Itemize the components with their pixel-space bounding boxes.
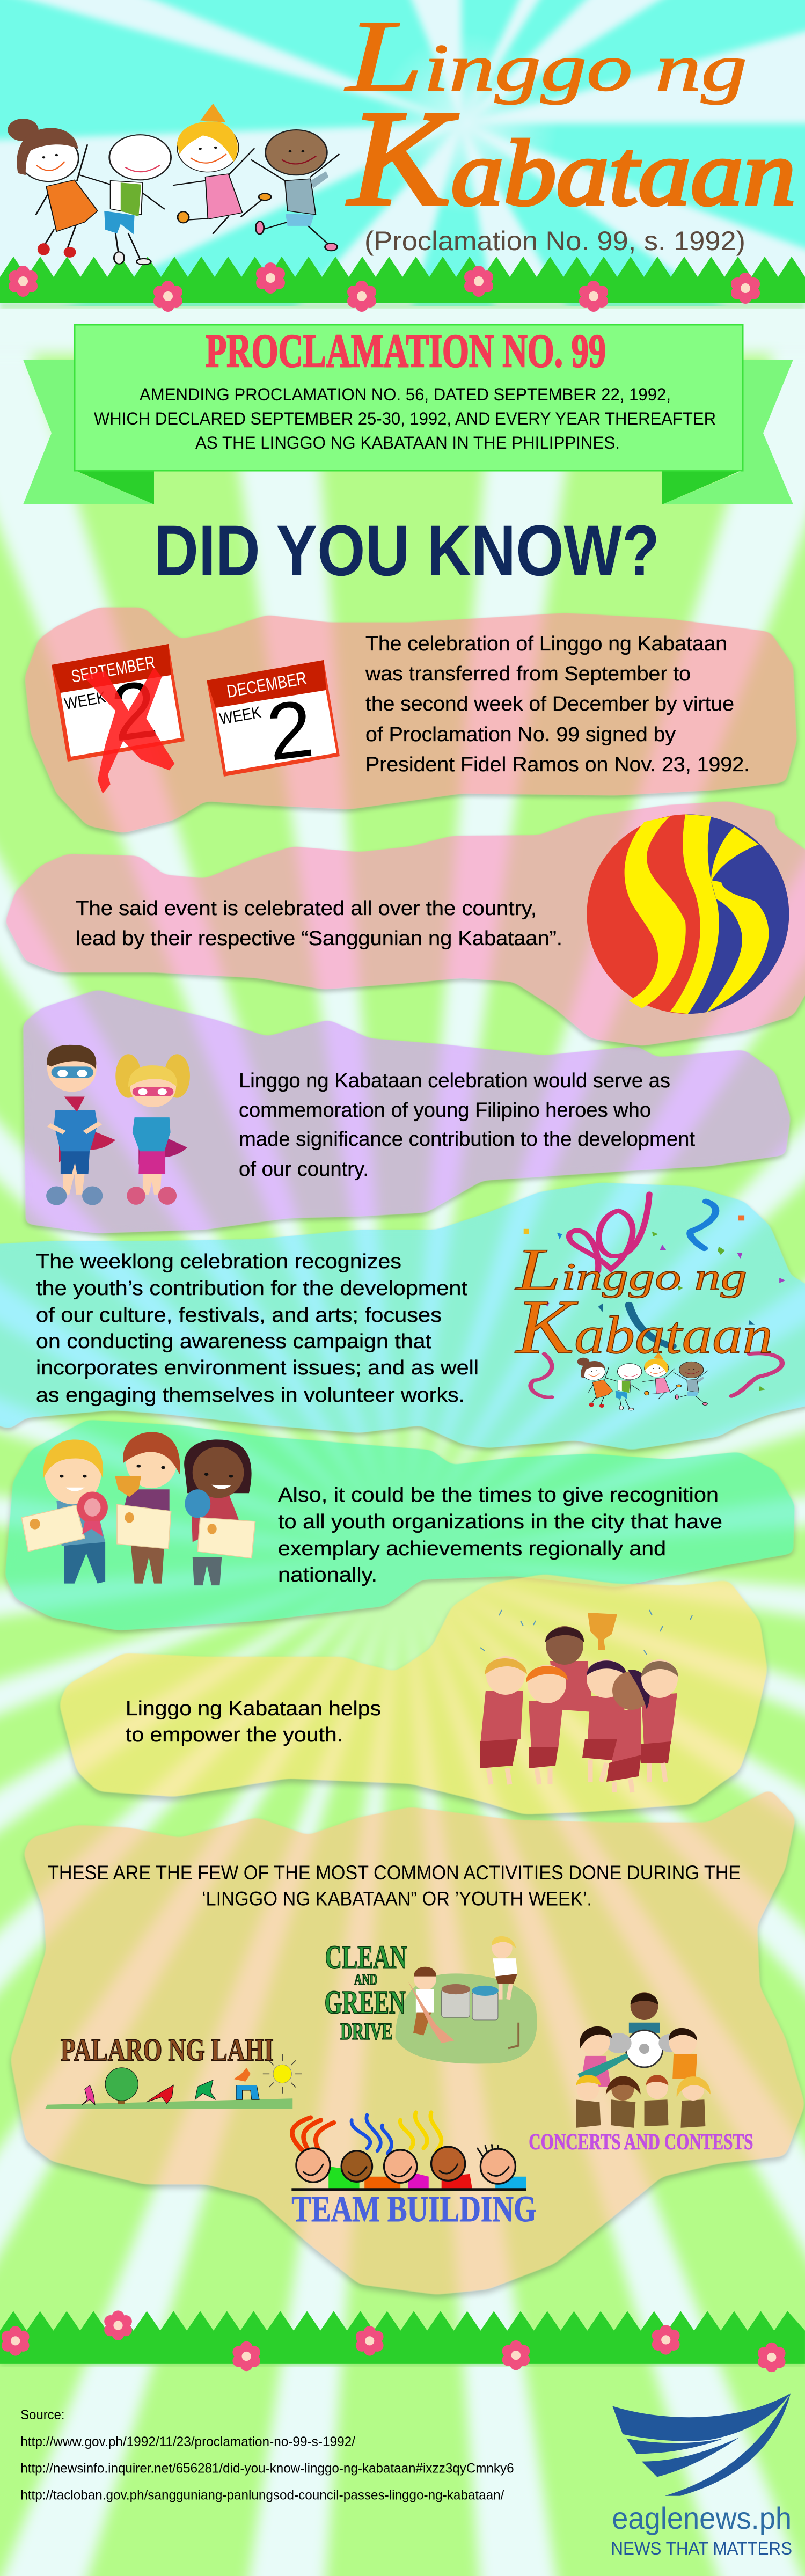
activity: Team Building — [291, 2112, 537, 2229]
source list: http://newsinfo.inquirer.net/656281/did-you-know-linggo-ng-kabataan#ixzz3qyCmnky6 — [20, 2461, 514, 2476]
illustration: kids with awards — [21, 1432, 255, 1585]
text block: was transferred from September to — [365, 663, 691, 685]
text block: on conducting awareness campaign that — [36, 1330, 431, 1353]
activities intro text: THESE ARE THE FEW OF THE MOST COMMON ACTIVITIES DONE DURING THE — [48, 1861, 741, 1884]
banner text: AS THE LINGGO NG KABATAAN IN THE PHILIPPINES. — [195, 433, 620, 452]
text block: commemoration of young Filipino heroes who — [239, 1099, 651, 1122]
text block: nationally. — [278, 1564, 377, 1586]
text block: Linggo ng Kabataan helps — [126, 1697, 381, 1720]
activity: Palaro ng Lahi: PALARO NG LAHI — [61, 2032, 274, 2068]
panel: young heroes — [23, 990, 791, 1233]
text block: Also, it could be the times to give recognition — [278, 1484, 719, 1506]
text block: Linggo ng Kabataan celebration would serve as — [239, 1070, 670, 1092]
hero boy — [46, 1045, 115, 1205]
activity: Team Building: TEAM BUILDING — [291, 2189, 537, 2229]
heading: Did You Know: DID YOU KNOW? — [154, 511, 660, 591]
icon: September calendar — [52, 644, 185, 794]
illustration: team with trophy — [480, 1610, 692, 1792]
banner heading: PROCLAMATION NO. 99 — [206, 325, 606, 377]
source list — [20, 2407, 514, 2502]
title: Linggo ng Kabataan — [344, 0, 796, 235]
panel: common activities — [10, 1789, 805, 2295]
panel: empower the youth — [59, 1574, 767, 1814]
illustration: ribbons and confetti — [524, 1194, 786, 1397]
text block: as engaging themselves in volunteer works. — [36, 1384, 465, 1407]
text block: to all youth organizations in the city that have — [278, 1511, 722, 1533]
logo: Eagle News: NEWS THAT MATTERS — [611, 2539, 792, 2559]
text block — [278, 1484, 722, 1586]
panel: weeklong celebration — [0, 1183, 805, 1450]
activities intro text: ‘LINGGO NG KABATAAN” OR ’YOUTH WEEK’. — [202, 1887, 592, 1910]
hero girl — [115, 1054, 190, 1205]
logo: Eagle News: eaglenews.ph — [612, 2501, 792, 2536]
text block: of Proclamation No. 99 signed by — [365, 723, 676, 746]
illustration: mini kids — [577, 1352, 708, 1410]
panel: Sangguniang Kabataan — [5, 801, 805, 1046]
icon: December calendar — [207, 660, 340, 778]
logo: Eagle News — [611, 2393, 792, 2559]
illustration: hero kids — [46, 1045, 190, 1205]
activity: Concerts and Contests — [529, 1992, 753, 2155]
text block — [126, 1697, 381, 1746]
panel: transfer of celebration — [25, 608, 797, 833]
text block — [365, 633, 750, 776]
text block — [239, 1070, 695, 1181]
text block: the youth’s contribution for the development — [36, 1277, 467, 1300]
icon: September calendar: 2 — [106, 663, 162, 758]
text block: The said event is celebrated all over the country, — [76, 897, 537, 920]
banner text: WHICH DECLARED SEPTEMBER 25-30, 1992, AND EVERY YEAR THEREAFTER — [94, 409, 716, 428]
footer flowers — [2, 2310, 786, 2372]
title: Linggo ng Kabataan: Kabataan — [347, 83, 796, 235]
mini logo: Linggo ng Kabataan — [514, 1236, 773, 1370]
text block — [36, 1250, 479, 1407]
activity: Clean and Green Drive: AND — [354, 1971, 377, 1988]
award kid three — [184, 1439, 255, 1585]
icon: December calendar: DECEMBER — [225, 668, 308, 701]
text block: incorporates environment issues; and as well — [36, 1357, 479, 1379]
award kid one — [21, 1440, 108, 1584]
text block: of our culture, festivals, and arts; focuses — [36, 1304, 442, 1327]
mini logo: Linggo ng Kabataan: Kabataan — [515, 1284, 773, 1370]
activity: Clean and Green Drive: CLEAN — [325, 1939, 407, 1975]
text block: of our country. — [239, 1158, 369, 1181]
header flowers — [9, 262, 760, 312]
header background: cyan sunburst — [0, 0, 805, 306]
icon: December calendar: 2 — [262, 683, 318, 778]
panel: recognition — [5, 1419, 795, 1630]
subtitle: (Proclamation No. 99, s. 1992) — [364, 226, 745, 256]
banner text: AMENDING PROCLAMATION NO. 56, DATED SEPTEMBER 22, 1992, — [140, 385, 671, 404]
text block: lead by their respective “Sanggunian ng Kabataan”. — [76, 927, 562, 950]
activity: Clean and Green Drive: GREEN — [325, 1985, 406, 2021]
icon: red cross — [82, 668, 174, 794]
text block: The weeklong celebration recognizes — [36, 1250, 401, 1273]
text block: the second week of December by virtue — [365, 693, 734, 715]
activity: Clean and Green Drive: DRIVE — [340, 2018, 393, 2044]
icon: wing — [612, 2393, 791, 2496]
activity: Clean and Green Drive — [325, 1936, 537, 2063]
footer grass strip — [0, 2311, 805, 2367]
source list: http://www.gov.ph/1992/11/23/proclamation-no-99-s-1992/ — [20, 2434, 355, 2449]
text block: made significance contribution to the development — [239, 1128, 695, 1151]
text block — [76, 897, 562, 950]
activities intro text — [48, 1861, 741, 1910]
banner text — [94, 385, 716, 452]
text block: to empower the youth. — [126, 1724, 343, 1746]
mini logo: Linggo ng Kabataan: L inggo ng — [514, 1236, 747, 1303]
banner: Proclamation No. 99 — [23, 325, 793, 504]
text block: President Fidel Ramos on Nov. 23, 1992. — [365, 753, 750, 776]
title: Linggo ng Kabataan: L inggo ng — [344, 0, 747, 113]
text block: exemplary achievements regionally and — [278, 1538, 666, 1560]
logo: SK emblem — [587, 814, 789, 1014]
icon: December calendar: WEEK — [218, 704, 262, 728]
illustration: four jumping kids — [8, 104, 339, 265]
ribbon tails — [23, 360, 793, 504]
activity: Palaro ng Lahi — [45, 2032, 302, 2109]
award kid two — [115, 1432, 180, 1584]
icon: September calendar: SEPTEMBER — [70, 652, 157, 686]
source list: Source: — [20, 2407, 65, 2423]
text block: The celebration of Linggo ng Kabataan — [365, 633, 727, 655]
header grass strip — [0, 257, 805, 309]
icon: September calendar: WEEK — [63, 689, 107, 713]
source list: http://tacloban.gov.ph/sangguniang-panlungsod-council-passes-linggo-ng-kabataan/ — [20, 2487, 504, 2502]
